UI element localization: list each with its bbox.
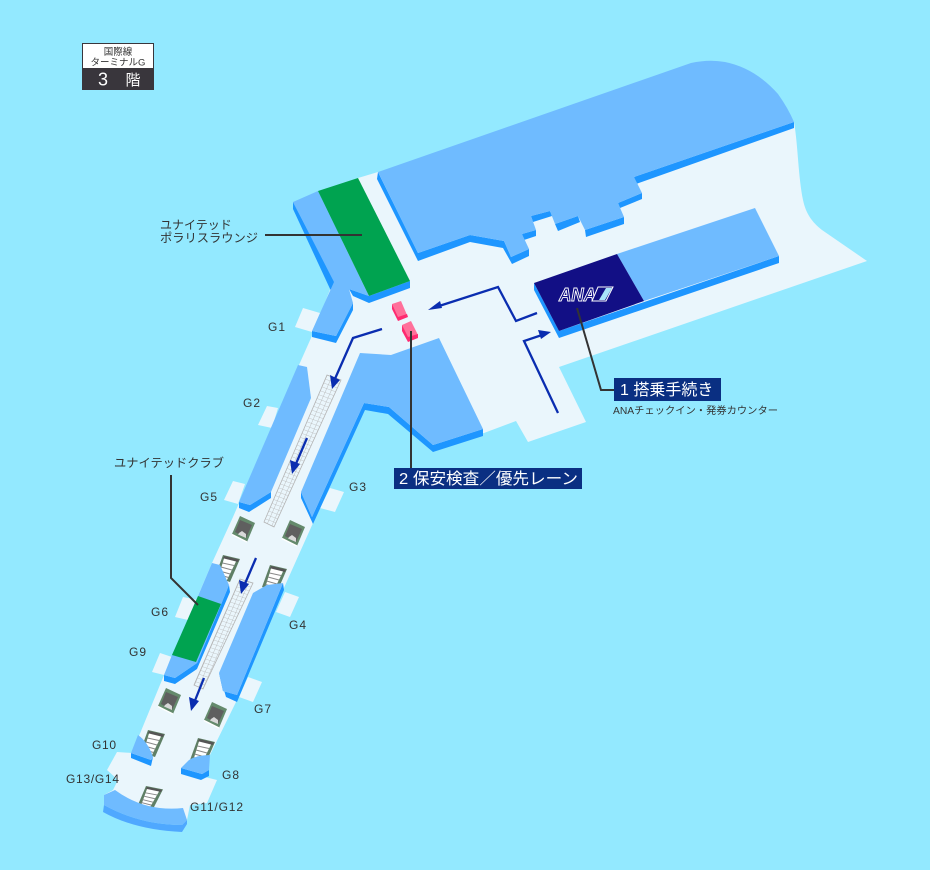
gate labels: G1 [268,320,285,334]
G10 block [131,735,153,766]
G2 / G5 block [239,365,311,512]
gate labels: G4 [289,618,306,632]
central block and G3 [301,338,483,524]
gate labels: G3 [349,480,366,494]
callout 1: check-in: 1 搭乗手続き [620,381,713,399]
floor badge [82,43,154,90]
label: United Club: ユナイテッドクラブ [114,455,224,470]
callout 2: security: 2 保安検査／優先レーン [399,470,578,488]
gate labels: G9 [129,645,146,659]
label: United Polaris Lounge [160,218,258,245]
green lounge: United Polaris [318,178,410,296]
gate labels: G6 [151,605,168,619]
leader lines [171,235,615,605]
gate labels: G11/G12 [190,800,243,814]
green lounge: United Club [172,596,221,662]
gate labels: G10 [92,738,116,752]
terminal floor [104,122,867,820]
G4 / G7 block [219,583,284,702]
G11-G14 curved block [103,790,187,832]
Polaris lounge block and G1 [293,178,410,343]
gate labels [66,320,366,814]
gate labels: G13/G14 [66,772,119,786]
stair wells [138,516,305,809]
gate labels: G2 [243,396,260,410]
floor badge: 階 [125,72,141,89]
gate labels: G8 [222,768,239,782]
floor badge: 3 [98,70,108,90]
floor badge: ターミナルG [91,58,145,68]
gate labels: G7 [254,702,271,716]
escalator: upper moving walkway [264,375,341,527]
main terminal block [377,61,794,264]
escalator: lower moving walkway [194,579,253,689]
gate labels: G5 [200,490,217,504]
G8 block [181,755,210,780]
G6 / G9 block [164,563,230,684]
label: United Polaris Lounge: ユナイテッド [160,218,232,232]
security lanes (pink) [392,301,418,342]
label: United Polaris Lounge: ポラリスラウンジ [160,231,258,245]
route arrows [189,287,558,711]
floor badge: 国際線 [104,46,133,58]
ANA logo: ANA [558,285,596,305]
callout 1: check-in: ANAチェックイン・発券カウンター [613,404,778,417]
callout 1: check-in [613,378,778,417]
ANA check-in block [534,208,779,338]
